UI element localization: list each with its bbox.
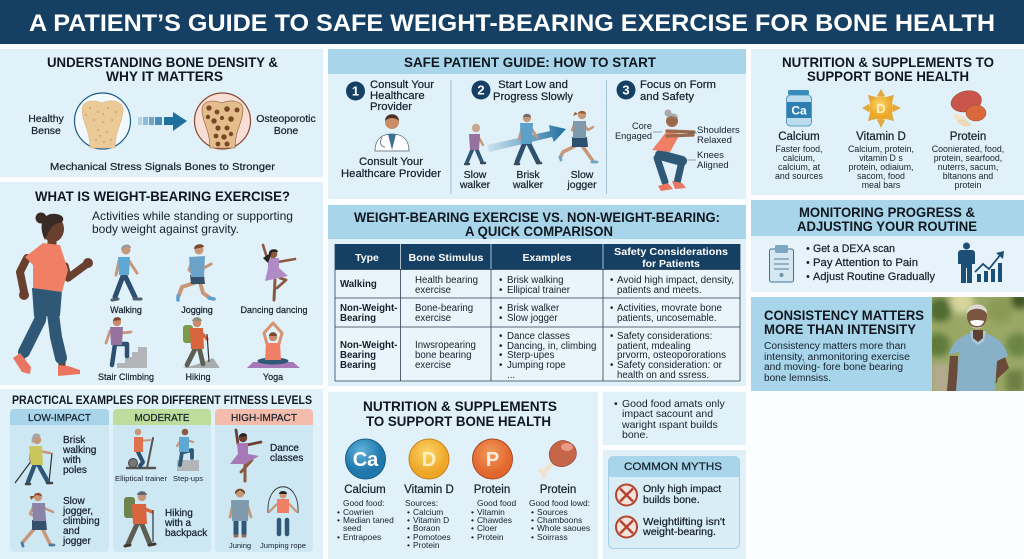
column: low-impact: LOW-IMPACT [28,412,92,424]
table header: for Patients [642,258,700,270]
column: calcium (right) [775,131,824,181]
column: calcium: Good food: [343,498,384,508]
column: protein: • [471,532,474,542]
step 1: consult provider [341,79,441,180]
figure: yoga [247,323,300,368]
figure: walking [112,244,141,300]
labels: form cues: Engaged [615,131,652,142]
title banner: A PATIENT’S GUIDE TO SAFE WEIGHT-BEARING EXERCISE FOR BONE HEALTH [29,10,995,37]
panel: comparison [328,205,746,386]
list: monitoring steps: • [806,271,810,283]
label: step-ups: Step-ups [173,474,203,483]
column: vitamin D (right): Vitamin D [856,131,906,143]
column: protein (right): Protein [950,131,986,143]
table row: non-weight-bearing 2: Bearing [340,350,376,361]
figure: slow jogger [560,111,597,162]
step 2: start low: 2 [477,82,485,98]
column: protein food: Protein [540,484,576,496]
icon: calcium: Ca [353,449,379,471]
column: protein: Protein [474,484,510,496]
list: monitoring steps: Get a DEXA scan [813,243,895,255]
icon: protein meat [951,91,986,128]
definition text [92,209,293,236]
column: vitamin D (right): vitamin D s [859,153,903,163]
panel: good food note: • [614,398,618,410]
column: protein (right): nuterrs, sacum, [938,162,998,172]
column: vitamin D (right): Calcium, protein, [848,144,914,154]
step 1: consult provider: Consult Your [370,79,434,91]
column: calcium [337,484,394,542]
icon: vitamin D sun: D [876,101,886,116]
step 1: consult provider: Consult Your [359,156,423,168]
column: vitamin D: • [407,523,410,533]
table row: non-weight-bearing 1: Non-Weight- [340,303,397,314]
step 1: consult provider: Healthcare Provider [341,168,441,180]
text: slow jogger: jogger, [62,506,93,517]
column: protein food: • [531,515,534,525]
panel: good food note: impact sacount and [622,408,713,420]
column: low-impact [10,409,109,552]
column: vitamin D: • [407,540,410,550]
label: slow walker [459,169,491,191]
column: protein food: Soirrass [537,532,568,542]
column: moderate [113,409,211,552]
table row: non-weight-bearing 2: health on and ssress. [617,370,709,381]
icon: person with rising chart [958,242,1004,283]
icon: clipboard [770,245,794,282]
table row: non-weight-bearing 2: Sterp-upes [507,350,555,361]
text: brisk walking with poles [62,435,96,476]
label: brisk walker [512,169,544,191]
heading: consistency [764,308,924,337]
table row: non-weight-bearing 2: Safety considerations: [617,331,712,342]
label: slow walker: walker [459,179,491,191]
column: protein: • [471,507,474,517]
panel: practical examples [0,389,323,559]
text: dance classes [270,443,303,464]
table row: non-weight-bearing 2: • [610,331,614,342]
icon: calcium jar [786,90,812,126]
table row: non-weight-bearing 1: • [499,303,503,314]
table row: non-weight-bearing 2: Non-Weight- [340,340,397,351]
table row: walking: • [610,275,614,286]
heading: nutrition (right): NUTRITION & SUPPLEMENTS TO [782,54,994,70]
heading: common myths: COMMON MYTHS [624,461,722,473]
figure: elliptical trainer [127,429,155,468]
heading: comparison: A QUICK COMPARISON [465,224,613,239]
column: high-impact: HIGH-IMPACT [231,412,298,424]
myth 1: builds bone. [643,494,700,506]
column: calcium: • [337,507,340,517]
column: calcium (right): Faster food, [776,144,822,154]
icon: vitamin D: D [422,449,436,471]
column: high-impact [215,409,313,552]
icon: doctor [375,114,409,151]
text: slow jogger: and [63,526,80,537]
column: vitamin D: Vitamin D [413,515,449,525]
myth 2: weight-bearing. [642,526,716,538]
table row: non-weight-bearing 2 [340,331,726,381]
figure: step-ups [177,429,199,471]
text: hiking with a backpack [164,508,208,539]
column: protein: Good food [477,498,516,508]
labels: form cues [615,121,740,171]
labels: form cues: Shoulders [697,125,740,136]
heading: understanding bone density: UNDERSTANDING BONE DENSITY & [47,54,278,70]
label: osteoporotic bone: Osteoporotic [256,113,316,125]
label: brisk walker: Brisk [516,169,540,181]
label: jogging: Jogging [181,305,213,315]
caption: mechanical stress: Mechanical Stress Signals Bones to Stronger [50,161,276,173]
column: protein (right) [932,131,1004,190]
label: dancing: Dancing dancing [240,305,308,315]
figure: stair climbing [106,317,147,368]
labels: form cues: Aligned [697,160,729,171]
table row: non-weight-bearing 1: Bearing [340,313,376,324]
table row: non-weight-bearing 2: Jumping rope [507,360,566,371]
panel: monitoring progress [751,200,1024,292]
heading: safe patient guide: SAFE PATIENT GUIDE: HOW TO START [404,55,657,70]
photo: smiling older man walking outdoors [926,290,1024,392]
column: vitamin D: • [407,515,410,525]
heading: nutrition (right) [782,54,994,84]
table header: Type [355,252,379,264]
body text: consistency: and moving- fore bone bearing [764,362,903,373]
figure: slow walker [465,124,485,164]
table row: non-weight-bearing 2: ... [507,370,515,381]
table header [355,246,728,270]
panel: good food note: bone. [622,429,648,441]
definition text: body weight against gravity. [92,222,239,236]
table row: walking [340,275,734,296]
step 3: focus on form: 3 [622,82,630,98]
table row: non-weight-bearing 2: • [610,360,614,371]
heading: comparison [354,210,720,239]
table row: walking: patients and meets. [617,285,702,296]
step 2: start low: Progress Slowly [493,91,573,103]
column: protein food [529,484,590,542]
text: brisk walking with poles: poles [63,465,87,476]
table row: non-weight-bearing 2: exercise [415,360,451,371]
column: calcium: Calcium [344,484,386,496]
panel: what is weight-bearing exercise [0,182,323,385]
column: calcium: Cowrien [343,507,374,517]
heading: practical examples: PRACTICAL EXAMPLES FOR DIFFERENT FITNESS LEVELS [12,395,312,407]
body text: consistency: bone lemnsiss. [764,373,831,384]
column: protein: Vitamin [477,507,505,517]
table row: walking: Walking [340,279,377,290]
column: vitamin D: Protein [413,540,440,550]
figure: walker with poles [15,433,52,484]
table row: non-weight-bearing 2: prvorm, osteopororations [617,350,726,361]
icon: calcium jar: Ca [791,104,807,118]
column: vitamin D: Pomotoes [413,532,451,542]
figure: hiker with backpack [124,491,155,546]
step 2: start low [459,79,597,191]
table row: walking: • [499,275,503,286]
body text: consistency: Consistency matters more than [764,341,906,352]
labels: form cues: Relaxed [697,135,732,146]
text: brisk walking with poles: with [62,455,81,466]
myth 1 [616,483,721,506]
column: protein [471,484,516,542]
column: protein food: Sources [537,507,568,517]
label: healthy bone: Bense [31,125,61,137]
table row: non-weight-bearing 1 [340,303,722,324]
column: calcium (right): calcium, at [778,162,821,172]
step 1: consult provider: 1 [352,84,359,98]
heading: nutrition (centre) [363,398,557,429]
column: vitamin D [404,484,454,550]
label: brisk walker: walker [512,179,544,191]
figure: dancing [263,245,295,300]
panel: consistency matters [751,290,1024,392]
panel: good food note [603,392,746,445]
heading: nutrition (centre): TO SUPPORT BONE HEALTH [366,413,551,429]
table row: non-weight-bearing 2: Dancing, in, climbing [507,341,596,352]
icon: protein P: P [486,449,499,471]
list: monitoring steps [806,243,935,283]
arrow: progression [487,125,566,152]
table row: non-weight-bearing 2: • [499,341,503,352]
icon: calcium [346,439,386,479]
panel: understanding bone density [0,49,323,177]
label: slow jogger [566,169,597,191]
icon: osteoporotic bone [194,93,250,149]
table row: non-weight-bearing 2: Safety consideration: or [617,360,723,371]
column: protein food: Good food lowd: [529,498,590,508]
column: protein (right): bltanons and [943,171,993,181]
step 1: consult provider: Healthcare [370,90,425,102]
heading: comparison: WEIGHT-BEARING EXERCISE VS. NON-WEIGHT-BEARING: [354,210,720,225]
label: healthy bone [28,113,65,137]
myth 2: Weightlifting isn't [643,516,725,528]
table row: non-weight-bearing 1: patients, uncosemable. [617,313,717,324]
table row: walking: Health bearing [415,275,478,286]
icon: vitamin D [409,439,449,479]
myth 2 [616,516,725,538]
column: vitamin D (right): protein, odiaium, [848,162,914,172]
table header: Examples [522,252,572,264]
figure: person standing [230,488,251,536]
icon: drumstick [538,440,576,479]
table row: non-weight-bearing 1: Activities, movrate bone [617,303,722,314]
column: protein food: Chamboons [537,515,582,525]
column: calcium: seed [343,523,362,533]
column: protein: Protein [477,532,504,542]
table row: non-weight-bearing 2: Dance classes [507,331,570,342]
label: elliptical trainer: Elliptical trainer [115,474,168,483]
heading: consistency: MORE THAN INTENSITY [764,322,916,337]
column: calcium: Entrapoes [343,532,381,542]
label: osteoporotic bone: Bone [274,125,298,137]
panel: nutrition and supplements (centre) [328,392,598,559]
figure: slow jogger [22,493,54,546]
label: slow jogger: Slow [571,169,594,181]
figure: squat [652,110,697,191]
text: slow jogger: climbing [63,516,100,527]
text: hiking with a backpack: with a [164,518,192,529]
column: vitamin D (right): meal bars [862,180,901,190]
label: hiking: Hiking [185,372,211,382]
column: vitamin D (right) [848,131,914,190]
figure: dancer [230,430,261,481]
table row: non-weight-bearing 1: Slow jogger [507,313,558,324]
column: vitamin D: Vitamin D [404,484,454,496]
column: protein: • [471,515,474,525]
column: protein food: • [531,532,534,542]
column: calcium: • [337,515,340,525]
labels: form cues: Core [632,121,652,132]
panel: good food note: waright ıspant builds [621,419,718,431]
heading: understanding bone density [47,54,278,84]
column: calcium (right): and sources [775,171,824,181]
table row: walking: Brisk walking [507,275,564,286]
arrow: bone density loss [138,112,187,131]
text: hiking with a backpack: backpack [165,528,208,539]
column: calcium: • [337,532,340,542]
text: slow jogger [62,496,100,547]
figure: jumping rope [268,487,298,534]
column: protein food: • [531,507,534,517]
label: slow jogger: jogger [566,179,597,191]
column: vitamin D (right): sacom, food [857,171,905,181]
column: calcium (right): Calcium [778,131,820,143]
step 3: focus on form [615,79,740,191]
figure: large walking woman [13,212,93,376]
definition text: Activities while standing or supporting [92,209,293,223]
step 3: focus on form: and Safety [640,91,694,103]
heading: consistency: CONSISTENCY MATTERS [764,308,924,323]
table row: walking: Avoid high impact, density, [617,275,734,286]
heading: what is weight-bearing: WHAT IS WEIGHT-BEARING EXERCISE? [35,188,290,204]
list: monitoring steps: Pay Attention to Pain [813,257,918,269]
column: moderate: MODERATE [134,412,190,424]
column: protein: • [471,523,474,533]
text: dance classes: classes [270,453,303,464]
column: protein: Chawdes [477,515,512,525]
list: monitoring steps: • [806,243,810,255]
table header: Bone Stimulus [408,252,484,264]
panel: common myths [603,450,746,559]
label: healthy bone: Healthy [28,113,65,125]
icon: protein P [472,439,512,479]
heading: nutrition (centre): NUTRITION & SUPPLEMENTS [363,398,557,414]
text: slow jogger: jogger [62,536,91,547]
text: brisk walking with poles: walking [62,445,96,456]
icon: vitamin D sun [862,89,901,128]
column: vitamin D: Calcium [413,507,443,517]
heading: understanding bone density: WHY IT MATTERS [106,68,223,84]
table row: non-weight-bearing 2: • [499,350,503,361]
label: slow walker: Slow [464,169,487,181]
panel: safe patient guide [328,49,746,199]
table row: non-weight-bearing 2: Inwsropearing [415,340,476,351]
table row: non-weight-bearing 2: Bearing [340,360,376,371]
panel: good food note: Good food amats only [622,398,725,410]
step 2: start low: Start Low and [498,79,568,91]
labels: form cues: Knees [697,150,724,161]
table row: non-weight-bearing 2: • [499,331,503,342]
myth 1: Only high impact [643,483,721,495]
panel: nutrition and supplements (right) [751,49,1024,195]
body text: consistency [764,341,910,384]
table row: non-weight-bearing 1: exercise [415,313,451,324]
figure: jogging [178,244,214,300]
table row: walking: • [499,285,503,296]
heading: monitoring: MONITORING PROGRESS & [799,204,975,220]
body text: consistency: intensity, anmonitoring exercise [764,352,910,363]
column: vitamin D: • [407,532,410,542]
title banner [0,0,1024,44]
label: yoga: Yoga [263,372,283,382]
figure: hiking [182,317,220,368]
table row: non-weight-bearing 1: Bone-bearing [415,303,473,314]
column: protein food: Whole saoues [537,523,590,533]
label: juning: Juning [229,541,251,550]
step 1: consult provider: Provider [370,101,412,113]
label: osteoporotic bone [256,113,316,137]
column: vitamin D: Sources: [405,498,438,508]
column: protein (right): protein, searfood, [934,153,1002,163]
column: protein (right): protein [955,180,982,190]
icon: healthy bone [74,93,130,149]
text: hiking with a backpack: Hiking [165,508,193,519]
column: protein (right): Coonierated, food, [932,144,1004,154]
table row: non-weight-bearing 1: Brisk walker [507,303,560,314]
label: jumping rope: Jumping rope [260,541,306,550]
table row: non-weight-bearing 1: • [499,313,503,324]
text: brisk walking with poles: Brisk [63,435,86,446]
list: monitoring steps: Adjust Routine Gradually [813,271,935,283]
column: calcium: Median taned [343,515,394,525]
table row: non-weight-bearing 2: • [499,360,503,371]
text: dance classes: Dance [270,443,299,454]
table row: non-weight-bearing 2: bone bearing [415,350,472,361]
figure: brisk walker [515,114,541,164]
column: calcium (right): calcium, [783,153,815,163]
table row: walking: Ellipical trainer [507,285,571,296]
step 3: focus on form: Focus on Form [640,79,716,91]
heading: monitoring [797,204,977,234]
column: protein: Cloer [477,523,497,533]
text: slow jogger: Slow [63,496,85,507]
column: protein food: • [531,523,534,533]
table header: Safety Considerations [614,246,728,258]
table row: walking: exercise [415,285,451,296]
table: comparison [335,244,740,381]
column: vitamin D: • [407,507,410,517]
column: vitamin D: Boraon [413,523,440,533]
heading: monitoring: ADJUSTING YOUR ROUTINE [797,218,977,234]
heading: nutrition (right): SUPPORT BONE HEALTH [807,68,969,84]
label: stair climbing: Stair Climbing [98,372,154,382]
table row: non-weight-bearing 1: • [610,303,614,314]
table row: non-weight-bearing 2: patient, mdealing [617,341,691,352]
label: walking: Walking [110,305,142,315]
list: monitoring steps: • [806,257,810,269]
